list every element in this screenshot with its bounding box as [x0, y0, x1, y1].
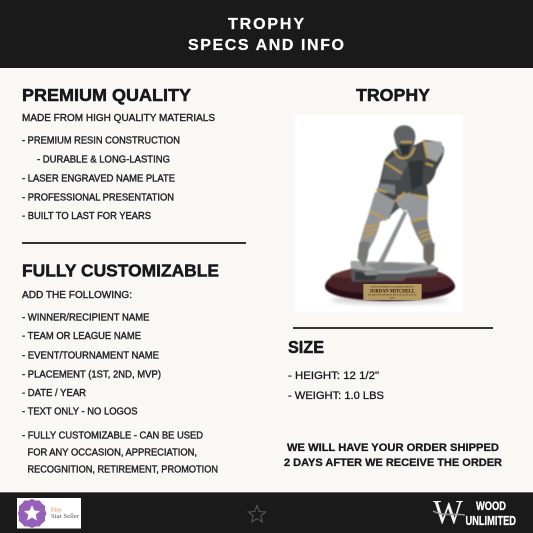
wooden base [325, 265, 455, 301]
glove [397, 192, 414, 211]
feature list: - BUILT TO LAST FOR YEARS [22, 211, 151, 222]
logo: wood unlimited: WOOD [476, 499, 506, 513]
customization list: - TEXT ONLY - NO LOGOS [22, 407, 138, 418]
weight spec: - WEIGHT: 1.0 LBS [288, 390, 384, 402]
helmet and face [394, 125, 415, 156]
title: SPECS AND INFO [188, 37, 344, 54]
customization list: - PLACEMENT (1ST, 2ND, MVP) [22, 369, 161, 380]
left leg [359, 192, 395, 249]
hockey player figure [357, 125, 444, 276]
occasion note: - FULLY CUSTOMIZABLE - CAN BE USED [22, 431, 203, 442]
feature list: - PREMIUM RESIN CONSTRUCTION [22, 136, 180, 146]
heading: trophy: TROPHY [356, 85, 430, 105]
logo: wood unlimited: W [433, 494, 464, 531]
badge: etsy star seller: Star Seller [51, 514, 79, 520]
logo: wood unlimited [433, 494, 516, 531]
customization list: - WINNER/RECIPIENT NAME [22, 312, 150, 323]
panel: fully customizable [22, 261, 219, 476]
customization list: - DATE / YEAR [22, 388, 86, 399]
footer band [0, 492, 533, 533]
name plate: OUTSTANDING ACHIEVEMENT [371, 286, 414, 289]
name plate: JORDAN MITCHELL [370, 290, 416, 295]
shipping note: WE WILL HAVE YOUR ORDER SHIPPED [287, 442, 499, 454]
statue platform [351, 261, 438, 282]
heading: fully customizable: FULLY CUSTOMIZABLE [22, 261, 219, 281]
heading: size: SIZE [288, 337, 324, 357]
trophy photo [295, 115, 463, 312]
customization list: - EVENT/TOURNAMENT NAME [22, 350, 159, 361]
right leg [408, 198, 434, 266]
panel: size [288, 337, 384, 402]
occasion note [22, 431, 218, 476]
name plate: IN RECOGNITION OF EXCELLENCE [368, 294, 417, 297]
feature list: - DURABLE & LONG-LASTING [37, 154, 170, 165]
torso [377, 140, 444, 201]
hockey stick [363, 211, 407, 276]
icon: star [248, 506, 266, 522]
height spec: - HEIGHT: 12 1/2" [288, 370, 379, 382]
feature list: - LASER ENGRAVED NAME PLATE [22, 174, 175, 184]
badge: etsy star seller [17, 498, 81, 528]
gold trim [363, 140, 433, 241]
customization list [22, 312, 161, 418]
shipping note: 2 DAYS AFTER WE RECEIVE THE ORDER [284, 457, 502, 469]
subheading: materials: MADE FROM HIGH QUALITY MATERIALS [22, 112, 215, 124]
subheading: add the following: ADD THE FOLLOWING: [22, 290, 132, 301]
name plate [363, 284, 422, 300]
customization list: - TEAM OR LEAGUE NAME [22, 331, 141, 342]
header band [0, 0, 533, 68]
name plate: 2016 [390, 297, 395, 300]
panel: premium quality [22, 85, 215, 222]
badge: etsy star seller: Etsy [51, 508, 62, 514]
shipping note [284, 442, 502, 469]
occasion note: RECOGNITION, RETIREMENT, PROMOTION [28, 465, 218, 476]
heading: premium quality: PREMIUM QUALITY [22, 85, 191, 105]
feature list [22, 136, 180, 222]
shorts [370, 188, 428, 222]
occasion note: FOR ANY OCCASION, APPRECIATION, [28, 447, 197, 458]
feature list: - PROFESSIONAL PRESENTATION [22, 192, 174, 203]
title [188, 16, 344, 54]
title: TROPHY [228, 16, 304, 33]
